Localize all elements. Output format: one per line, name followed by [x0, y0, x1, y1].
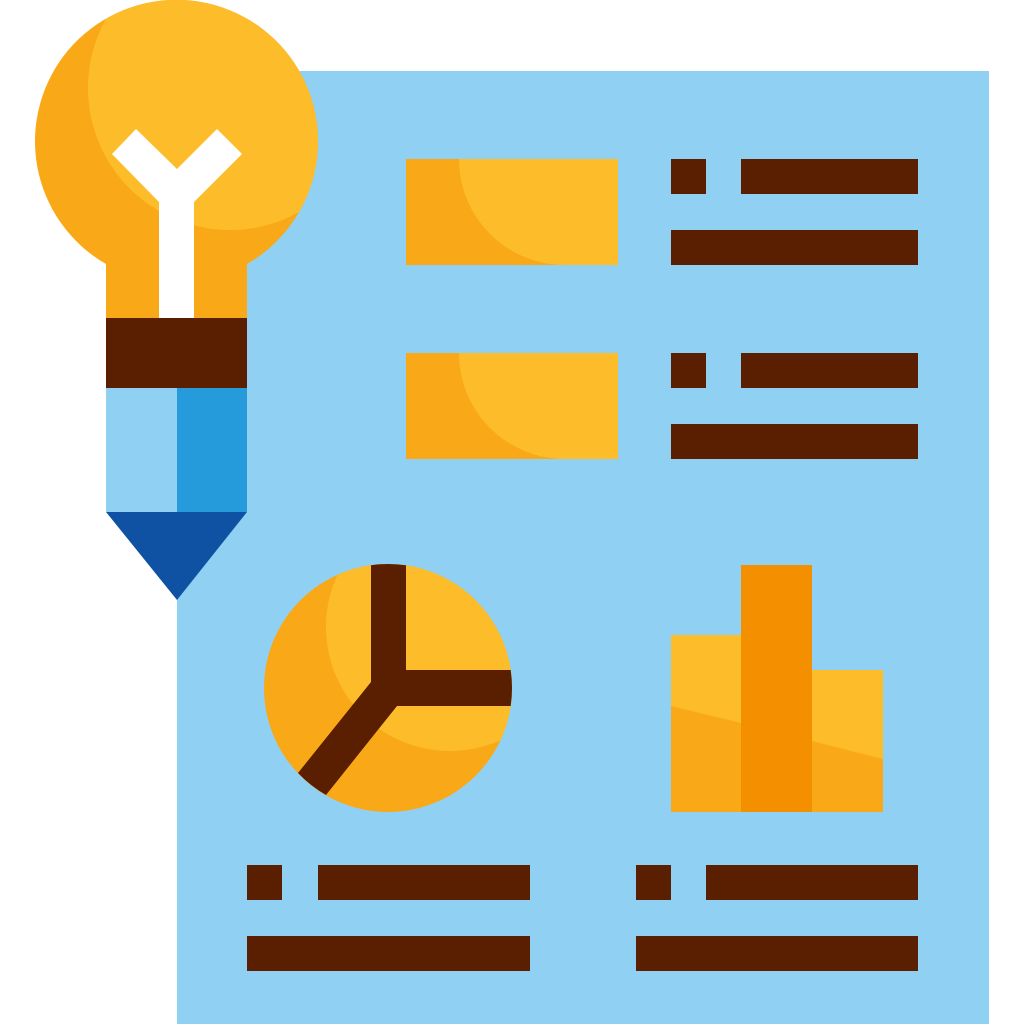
icon: top image placeholder	[406, 159, 618, 265]
bulb highlight	[88, 0, 318, 230]
bar chart	[671, 565, 883, 812]
text lines: bottom left	[247, 865, 530, 971]
bulb glass	[35, 0, 318, 318]
icon: second image placeholder	[406, 353, 618, 459]
text lines: top row	[671, 159, 918, 265]
pencil body left	[106, 388, 177, 512]
pie chart	[264, 564, 512, 812]
text lines: bottom right	[636, 865, 918, 971]
pencil tip	[106, 512, 247, 600]
text lines: second row	[671, 353, 918, 459]
panel: document page	[177, 71, 989, 1024]
bulb filament	[112, 129, 242, 318]
pencil ferrule	[106, 318, 247, 388]
pencil body right	[177, 388, 247, 512]
icon: light bulb pencil	[35, 0, 318, 600]
